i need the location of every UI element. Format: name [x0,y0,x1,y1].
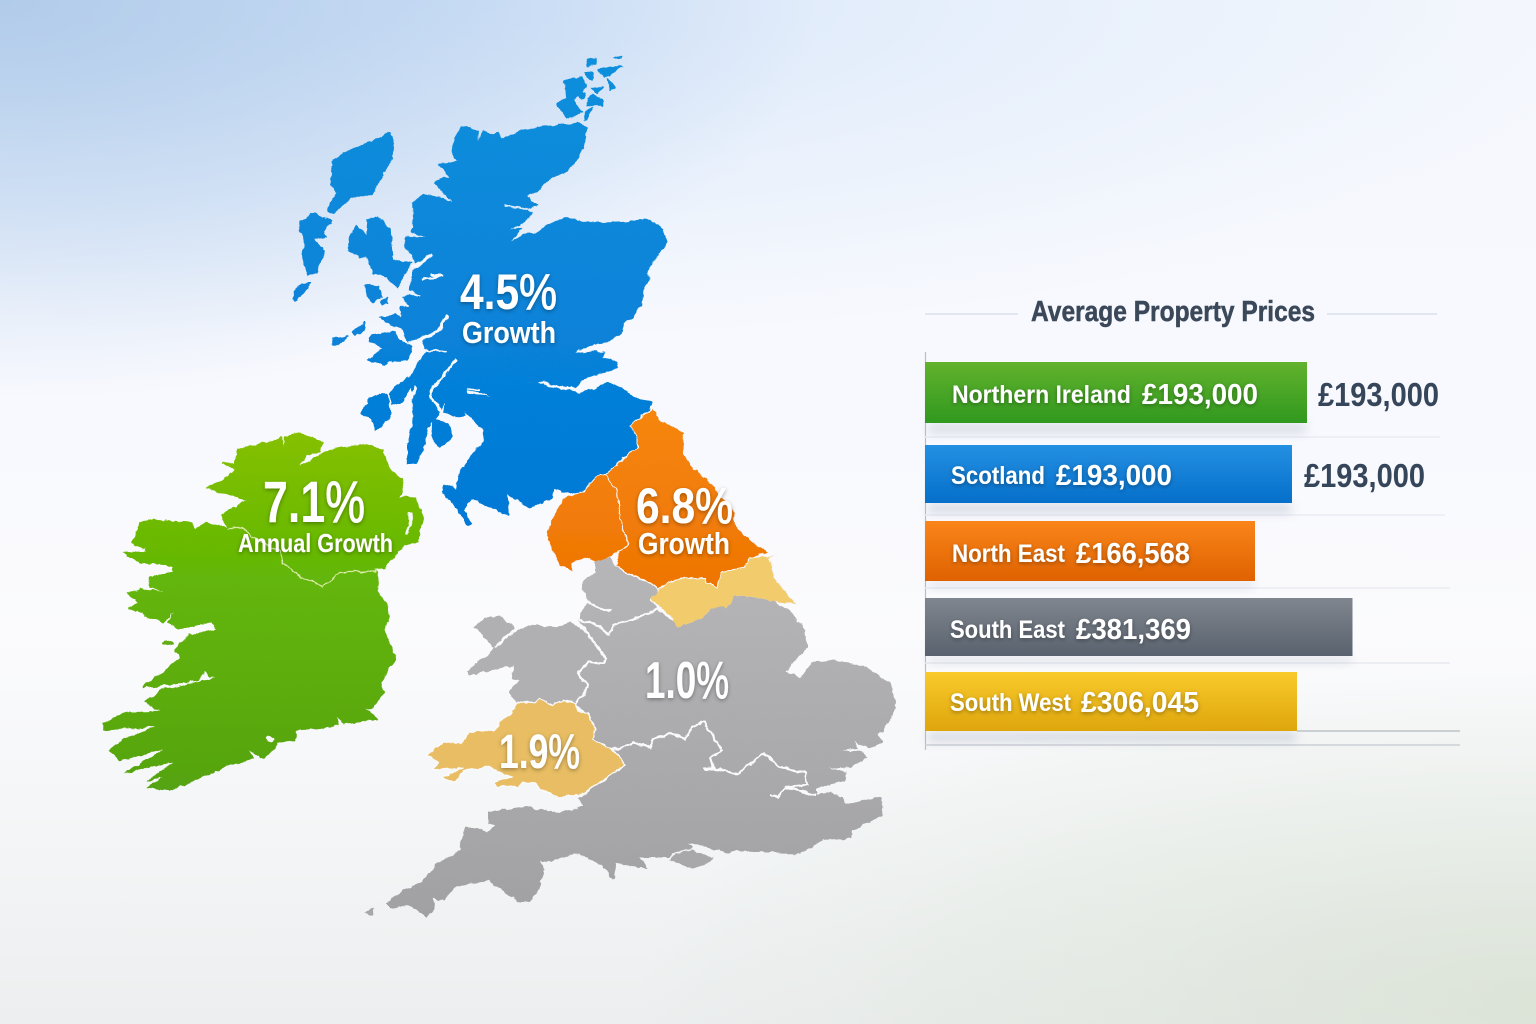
bar chart: property prices [925,352,1460,750]
region: North East and Cumbria [546,408,769,590]
chart axis and shelves [925,352,1460,750]
sea lochs of Scotland [405,255,480,418]
label: Scotland growth: 4.5% [460,264,557,320]
label: Scotland growth: Growth [462,315,556,350]
label: England growth: 1.0% [645,652,729,710]
region: South Wales [425,698,625,797]
region: North Wales [467,616,606,705]
map of UK and Ireland [103,55,896,917]
bar: North East: North East [952,540,1066,568]
bar: Scotland [925,445,1425,503]
bar: South East: £381,369 [1076,614,1191,646]
region boundaries [579,602,816,797]
Wales and England border [495,622,606,703]
chart heading: Average Property Prices: Average Property Prices [1031,296,1315,328]
bar: Northern Ireland: Northern Ireland [952,381,1131,409]
label: Scotland growth [460,264,557,350]
region: Scotland [293,55,667,525]
bar: North East [925,521,1255,581]
bar: South East [925,598,1352,656]
region: England [364,557,896,917]
region: Yorkshire [649,555,797,627]
bar: Scotland: £193,000 [1056,460,1172,492]
bar: South West: South West [950,689,1072,717]
label: North East growth: Growth [638,526,730,561]
bar: South West [925,672,1297,731]
bar: South West: £306,045 [1081,687,1199,719]
label: Wales growth: 1.9% [499,726,580,779]
bar: Scotland: Scotland [951,462,1045,490]
region: Ireland [103,433,423,790]
bar: Scotland: £193,000 [1304,457,1425,494]
bar: Northern Ireland: £193,000 [1142,379,1258,411]
label: Ireland growth: 7.1% [263,470,365,535]
label: Ireland growth [238,470,393,558]
label: North East growth [636,478,733,561]
label: North East growth: 6.8% [636,478,733,534]
bar: Northern Ireland [925,362,1439,423]
bar: South East: South East [950,616,1066,644]
bar: North East: £166,568 [1076,538,1190,570]
bar: Northern Ireland: £193,000 [1318,376,1439,413]
label: Ireland growth: Annual Growth [238,528,393,558]
